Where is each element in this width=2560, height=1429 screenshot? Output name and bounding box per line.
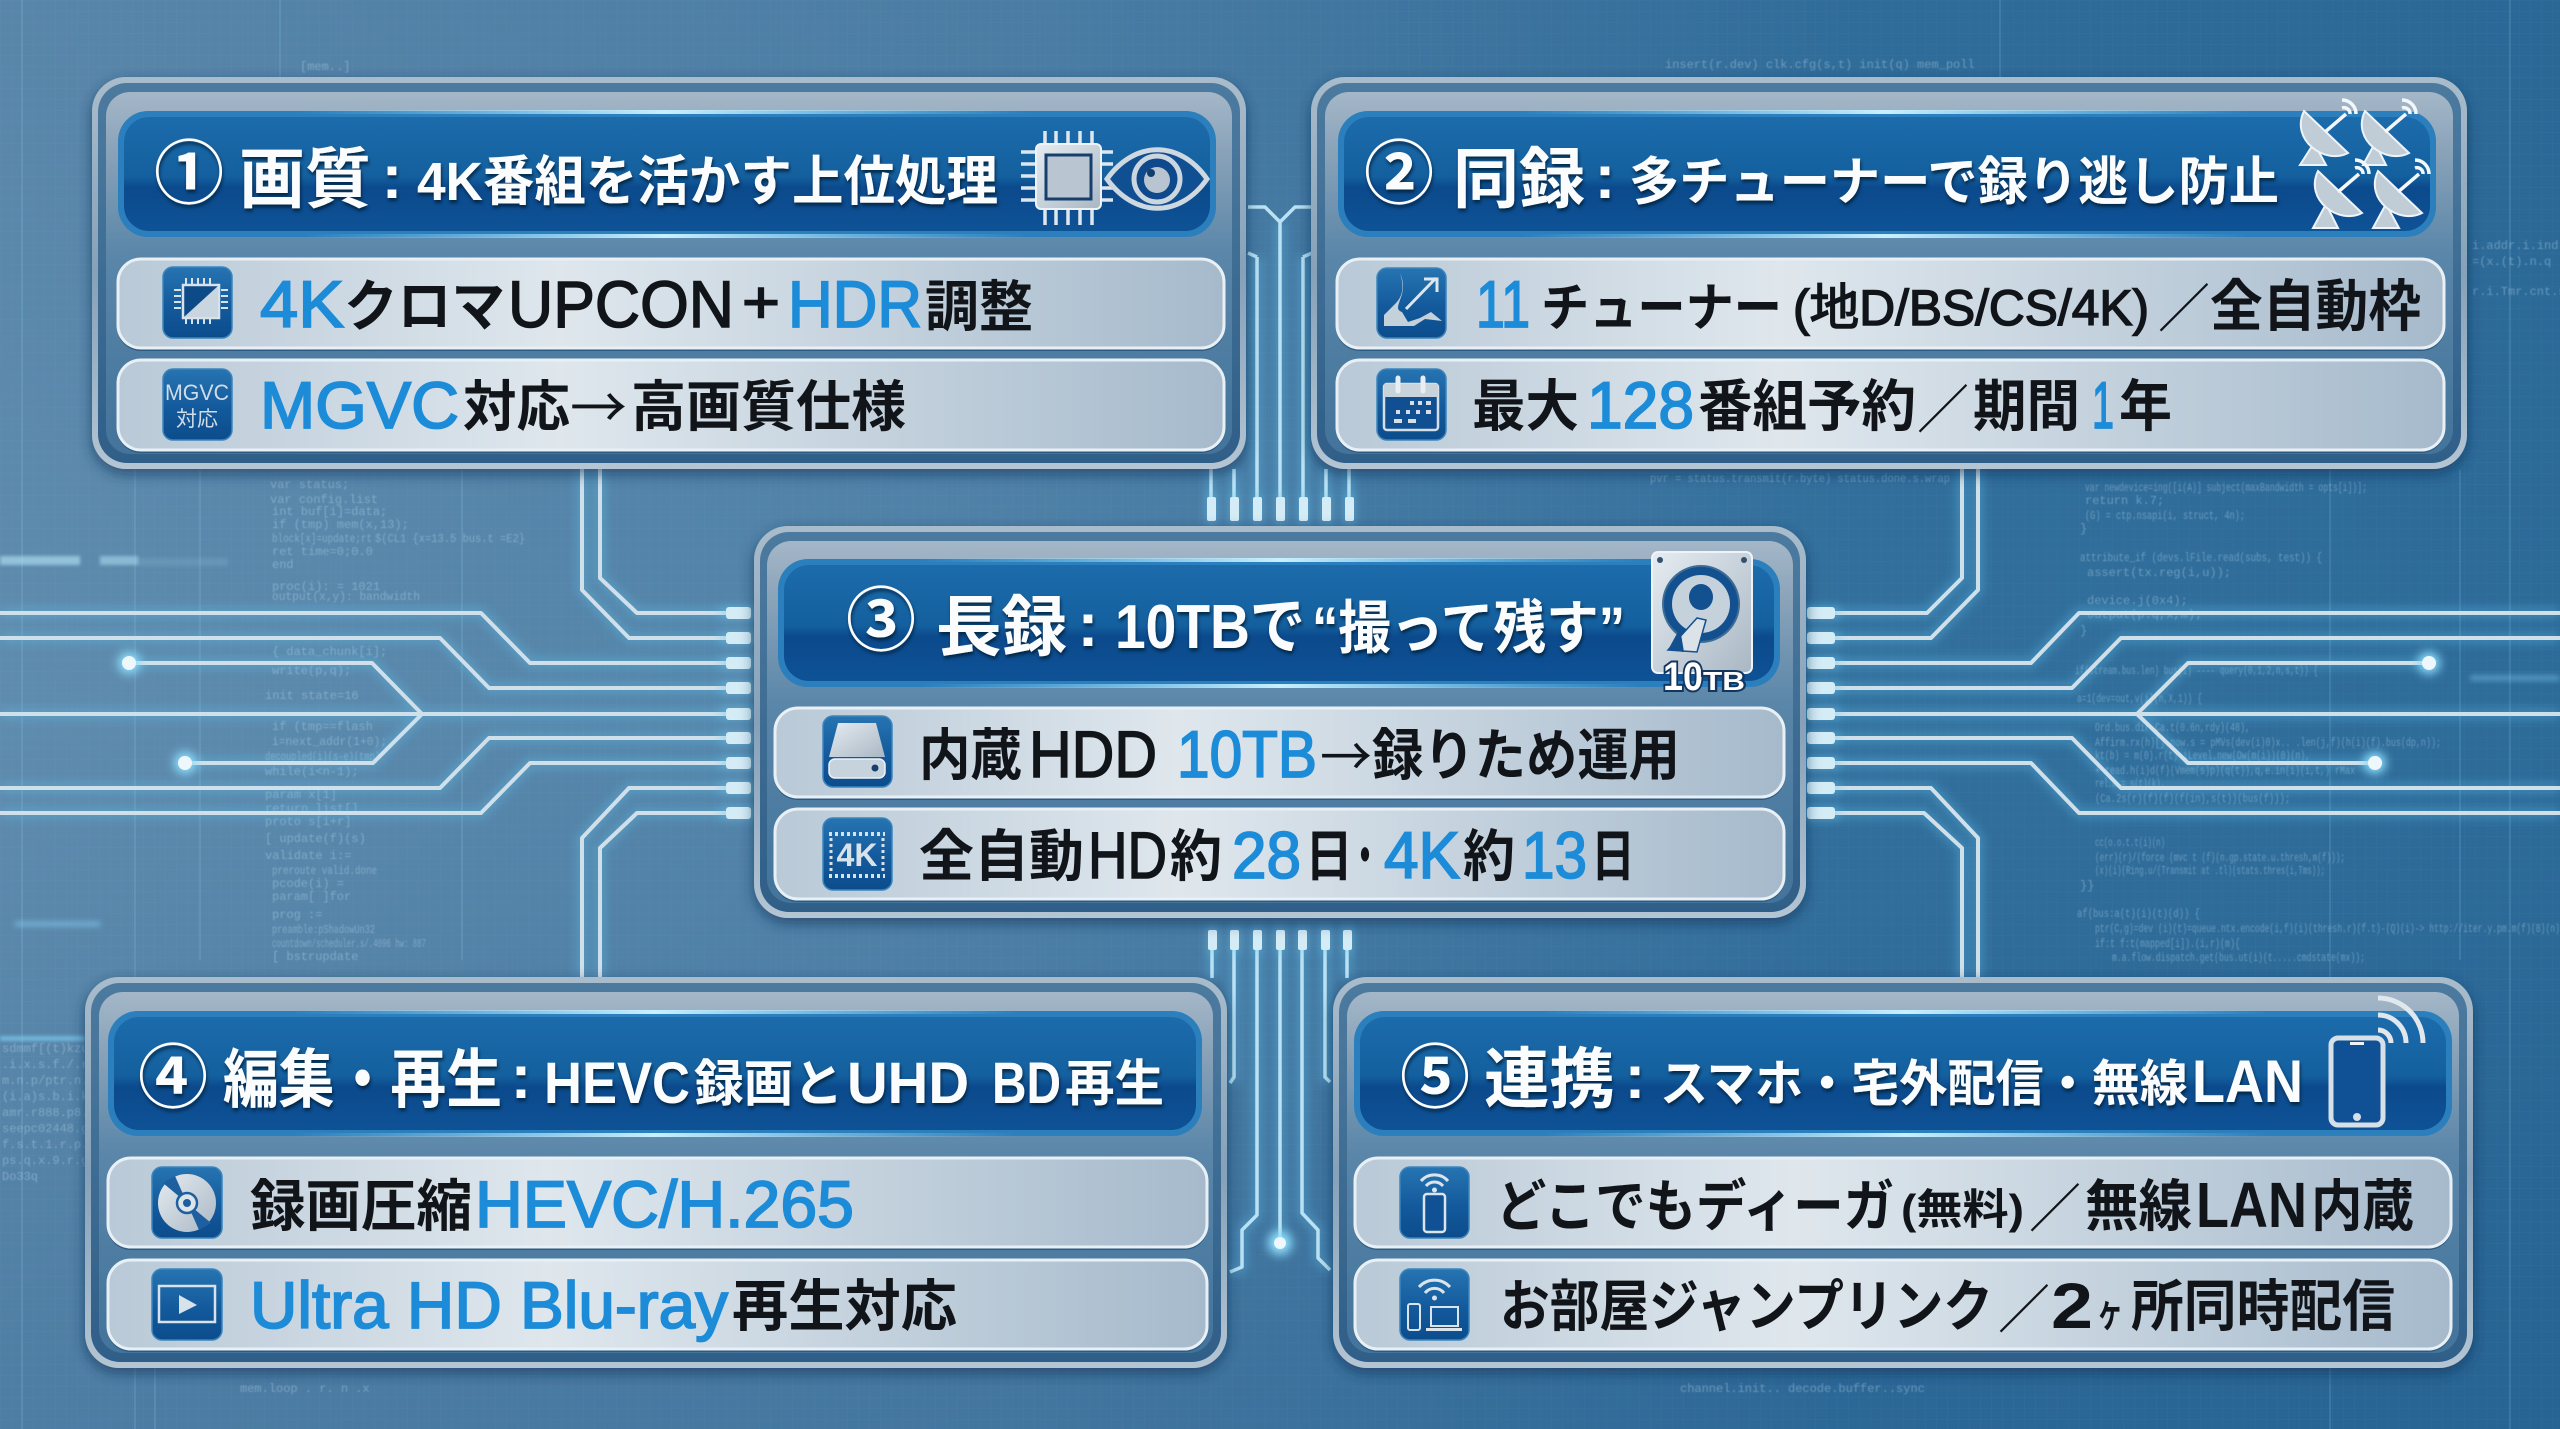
icon: MGVC bbox=[163, 369, 232, 440]
row: MGVC: 高画質仕様 bbox=[631, 376, 906, 438]
panel 5 heading: : bbox=[1625, 1043, 1645, 1112]
row: recording days: ・ bbox=[1349, 825, 1381, 888]
circuit traces bbox=[0, 207, 2560, 1272]
background code text: var newdevice=ing([i(A)] subject(maxBandwidth = opts[i])]; bbox=[2085, 481, 2367, 495]
background code text: Do33q bbox=[2, 1170, 38, 1184]
background code text: seepc02448.gbr. bbox=[2, 1122, 110, 1136]
panel 1 heading: ① bbox=[154, 135, 224, 213]
background code text: param[ ]for bbox=[272, 890, 351, 904]
trace end nodes bbox=[118, 652, 2440, 1255]
background code text: var status; bbox=[270, 478, 349, 492]
icon: smartphone wifi bbox=[2331, 998, 2423, 1125]
panel 1 heading: : bbox=[382, 143, 402, 212]
row: 4K chroma upconversion bbox=[117, 259, 1225, 351]
background code text: (i.a)s.b.i.k.l.3.z(7 bbox=[2, 1090, 146, 1104]
background code text: amr.r888.p8.g(r bbox=[2, 1106, 110, 1120]
background code text: m.a.flow.dispatch.get(bus.ut(i)(t.....cmdstate(mx)); bbox=[2112, 951, 2365, 965]
background code text: proto s[i+r] bbox=[265, 815, 351, 829]
background code text: sdmmf[(t)kzuo.tff bbox=[2, 1042, 124, 1056]
panel 3 heading: 10TBで bbox=[1115, 593, 1305, 662]
panel 3 heading: ③ bbox=[846, 582, 916, 660]
panel 3: long recording bbox=[754, 526, 1806, 918]
background code text: (Ca.2s(r)(f)(f)(f(in),s(t))(bus(f))); bbox=[2095, 792, 2290, 806]
row: Ultra HD Blu-ray bbox=[107, 1260, 1208, 1352]
panel 1 heading bbox=[118, 110, 1216, 238]
panel 2 heading: 同録 bbox=[1453, 142, 1585, 216]
row: 128 reservations: 年 bbox=[2119, 375, 2172, 438]
icon: hard disk 10TB: 10 bbox=[1663, 655, 1703, 699]
row: 4K chroma upconversion: クロマ bbox=[344, 275, 505, 338]
row: Ultra HD Blu-ray: 再生対応 bbox=[732, 1275, 957, 1338]
panel 2 frame bbox=[1311, 77, 2467, 469]
row: 11 tuners: (地D/BS/CS/4K) bbox=[1793, 280, 2149, 336]
panel 3 frame bbox=[754, 526, 1806, 918]
row: HEVC compression: HEVC/H.265 bbox=[475, 1167, 854, 1241]
row: room jump link: お部屋ジャンプリンク bbox=[1500, 1275, 1993, 1338]
row: 11 tuners: 11 bbox=[1476, 267, 1530, 341]
panel 4 heading: UHD bbox=[847, 1051, 969, 1116]
row: built-in HDD: 10TB bbox=[1177, 717, 1317, 791]
background code text: write(p,q); bbox=[272, 664, 351, 678]
row: built-in HDD bbox=[774, 708, 1785, 800]
background code text: pvr = status.transmit(r.byte) status.done.s.wrap bbox=[1650, 472, 1950, 486]
background code text: if(stream.bus.len) bus(i) ---- query(0,1,2,n,s,t)) { bbox=[2075, 664, 2318, 678]
row: 4K chroma upconversion: UPCON bbox=[508, 267, 734, 341]
icon: chip bbox=[163, 267, 232, 338]
row: room jump link: ／ bbox=[1998, 1268, 2050, 1343]
background code text: } bbox=[2080, 624, 2087, 638]
row: recording days bbox=[774, 809, 1785, 902]
background code text: if (tmp) mem(x,13); bbox=[272, 518, 409, 532]
panel 1 heading: 4K番組を活かす上位処理 bbox=[417, 152, 998, 212]
background code text: channel.init.. decode.buffer..sync bbox=[1680, 1382, 1925, 1396]
background code text: if (tmp==flash bbox=[272, 720, 373, 734]
icon: drive bbox=[823, 716, 892, 787]
row: 11 tuners: ／ bbox=[2158, 267, 2210, 342]
panel 4 frame bbox=[85, 977, 1227, 1368]
background code text: return k.7; bbox=[2085, 494, 2164, 508]
row: HEVC compression: 録画圧縮 bbox=[250, 1175, 472, 1238]
background code text: a=1(dev=out,v(i)(n,X,1)) { bbox=[2077, 692, 2202, 706]
icon: 4K bbox=[823, 818, 892, 890]
row: HEVC compression bbox=[107, 1158, 1208, 1250]
connector pads bbox=[726, 497, 1835, 950]
panel 4 heading: HEVC bbox=[544, 1051, 690, 1116]
row: MGVC: → bbox=[570, 363, 627, 445]
background code text: return list[] bbox=[265, 802, 359, 816]
row: 11 tuners bbox=[1336, 259, 2445, 351]
panel 4 heading: 再生 bbox=[1065, 1056, 1164, 1112]
trace glow bbox=[0, 222, 2560, 1272]
row: recording days: HD bbox=[1088, 818, 1167, 892]
icon: hard disk 10TB bbox=[1652, 552, 1752, 699]
panel 2 heading: 多チューナーで録り逃し防止 bbox=[1629, 154, 2279, 212]
panel 5 heading bbox=[1354, 998, 2452, 1137]
background code text: validate i:= bbox=[265, 849, 351, 863]
background code text: ret time=0;0.0 bbox=[272, 545, 373, 559]
row: 128 reservations bbox=[1336, 360, 2445, 453]
panel 4 heading: 録画と bbox=[694, 1056, 843, 1112]
icon: play screen bbox=[152, 1269, 222, 1340]
row: recording days: 全自動 bbox=[919, 825, 1084, 888]
background code text: + read.h(i)d(f)(Vmem(s)p)(q(t)),q,e.in(i)(i,t,) rMax bbox=[2095, 764, 2355, 778]
panel 3 heading: 長録 bbox=[936, 590, 1067, 664]
panel 2 heading: ② bbox=[1364, 135, 1434, 213]
background code text: var config.list bbox=[270, 493, 378, 507]
icon: devices wifi bbox=[1400, 1269, 1469, 1340]
background code text: { data_chunk[i]; bbox=[272, 645, 387, 659]
trace lines bbox=[0, 207, 2560, 1272]
row: built-in HDD: 録りため運用 bbox=[1372, 724, 1680, 787]
background code text: ps.q.x.9.r.g.p.9.f. bbox=[2, 1154, 139, 1168]
panel 4: edit and playback bbox=[85, 977, 1227, 1368]
panel 4 heading bbox=[108, 1010, 1202, 1137]
row: recording days: 4K bbox=[1384, 818, 1460, 892]
row: MGVC: MGVC bbox=[260, 368, 459, 442]
background code text: [ bstrupdate bbox=[272, 950, 358, 964]
background code text: proc(i): = 1021 bbox=[272, 580, 380, 594]
row: Dokodemo DIGA: (無料) bbox=[1901, 1186, 2024, 1233]
panel 4 heading: BD bbox=[992, 1051, 1061, 1116]
background code text: pcode(i) = bbox=[272, 877, 344, 891]
panel 4 heading: 編集・再生 bbox=[223, 1044, 502, 1116]
background code text: kt(b) = m(0).r(t) iLevel.new(Ow(m(i))(0)(n), bbox=[2095, 749, 2310, 763]
row: recording days: 約 bbox=[1463, 825, 1515, 888]
icon: MGVC: MGVC bbox=[165, 380, 229, 405]
row: 128 reservations: 128 bbox=[1587, 368, 1694, 442]
row: built-in HDD: 内蔵 bbox=[919, 724, 1022, 787]
background code text: device.j(0x4); bbox=[2087, 594, 2188, 608]
row: 4K chroma upconversion: 調整 bbox=[925, 276, 1033, 338]
background code text: while(i<n-1); bbox=[265, 765, 359, 779]
row: recording days: 13 bbox=[1522, 818, 1587, 892]
icon: disc bbox=[152, 1167, 222, 1238]
panel 3 heading bbox=[778, 552, 1780, 699]
panel 5 frame bbox=[1333, 977, 2473, 1368]
icon: chip and eye bbox=[1021, 131, 1207, 225]
background code text: int buf[i]=data; bbox=[272, 505, 387, 519]
row: MGVC: 対応 bbox=[463, 376, 570, 438]
row: Dokodemo DIGA: 内蔵 bbox=[2311, 1175, 2414, 1238]
row: Dokodemo DIGA bbox=[1354, 1158, 2452, 1250]
background code text: preroute valid.done bbox=[272, 864, 377, 878]
background code text: countdown/scheduler.s/.4096 hw: 887 bbox=[272, 937, 426, 951]
panel 4 heading: : bbox=[511, 1043, 531, 1112]
icon: antenna arrow bbox=[1377, 268, 1446, 338]
background code text: rel.m = s(t)(k), bbox=[2095, 777, 2165, 791]
row: 4K chroma upconversion: + bbox=[742, 269, 780, 336]
row: 11 tuners: 全自動枠 bbox=[2210, 275, 2421, 338]
background code text: decoupled(i)(s-e)(tmp) bbox=[265, 750, 380, 764]
row: room jump link: ヶ bbox=[2097, 1291, 2123, 1335]
panel 5 heading: 連携 bbox=[1484, 1042, 1615, 1116]
row: built-in HDD: → bbox=[1320, 713, 1372, 792]
icon: calendar bbox=[1377, 369, 1446, 440]
row: 128 reservations: ／ bbox=[1917, 368, 1969, 443]
panel 2 heading: : bbox=[1595, 143, 1615, 212]
panel 1: picture quality bbox=[92, 77, 1246, 469]
row: Dokodemo DIGA: ／ bbox=[2029, 1167, 2081, 1242]
row: room jump link: 2 bbox=[2051, 1270, 2093, 1342]
panel 2 heading bbox=[1338, 100, 2436, 238]
row: built-in HDD: HDD bbox=[1029, 717, 1157, 791]
background code text: Ord.bus.dir.Ca.t(0.6n,rdy)(48), bbox=[2095, 721, 2250, 735]
background code text: prog := bbox=[272, 908, 322, 922]
icon: hard disk 10TB: TB bbox=[1703, 666, 1745, 696]
row: Dokodemo DIGA: どこでもディーガ bbox=[1496, 1175, 1894, 1238]
background code text: preamble:pShadowUn32 bbox=[272, 923, 375, 937]
icon: MGVC: 対応 bbox=[176, 408, 218, 431]
background code text: m.n.p/ptr.n.pseam bbox=[2, 1074, 124, 1088]
icon: phone wifi bbox=[1400, 1167, 1469, 1238]
background code text: af(bus:a(t)(i)(t)(d)) { bbox=[2077, 907, 2200, 921]
background code text: output(x,y): bandwidth bbox=[272, 590, 420, 604]
panel 5 heading: ⑤ bbox=[1400, 1039, 1470, 1117]
background code text: if:t f:t(mapped[i]).(i,r)(m){ bbox=[2095, 937, 2240, 951]
panel 4 heading: ④ bbox=[138, 1039, 208, 1117]
background code text: init state=16 bbox=[265, 689, 359, 703]
background code text: output(p.q,x,m); bbox=[2087, 608, 2202, 622]
row: 128 reservations: 1 bbox=[2092, 368, 2114, 442]
row: recording days: 日 bbox=[1591, 825, 1635, 888]
row: 4K chroma upconversion: 4K bbox=[260, 267, 344, 341]
background code text: param x[1] bbox=[265, 788, 337, 802]
background code text: [mem..] bbox=[300, 60, 350, 74]
row: MGVC bbox=[117, 360, 1225, 453]
row: Dokodemo DIGA: LAN bbox=[2196, 1169, 2307, 1241]
background code text: mem.loop . r. n .x bbox=[240, 1382, 370, 1396]
row: recording days: 約 bbox=[1170, 825, 1222, 888]
row: 11 tuners: チューナー bbox=[1541, 280, 1782, 338]
row: 4K chroma upconversion: HDR bbox=[788, 267, 922, 341]
background code text: (G) = ctp.nsapi(i, struct, 4n); bbox=[2085, 509, 2245, 523]
background code text: attribute_if (devs.lFile.read(subs, test)) { bbox=[2080, 551, 2322, 565]
row: recording days: 日 bbox=[1305, 825, 1353, 888]
background code text: $(CL1 {x=13.5 bus.t =E2} bbox=[375, 532, 525, 546]
background code text: insert(r.dev) clk.cfg(s,t) init(q) mem_poll bbox=[1665, 58, 1975, 72]
background code text: } bbox=[2080, 522, 2087, 536]
background code text: end bbox=[272, 558, 294, 572]
background code text: [ update(f)(s) bbox=[265, 832, 366, 846]
background code text: cc(o.o.t.t(i)(n) bbox=[2095, 836, 2165, 850]
background code text: =(x.(t).n.q bbox=[2472, 255, 2551, 269]
background code text: assert(tx.reg(i,u)); bbox=[2087, 566, 2231, 580]
panel 5 heading: LAN bbox=[2192, 1048, 2303, 1115]
row: 128 reservations: 期間 bbox=[1973, 375, 2080, 438]
panel 2: simultaneous recording bbox=[1311, 77, 2467, 469]
background code text: f.s.t.1.r.p.g.s(t) bbox=[2, 1138, 132, 1152]
background code text: }} bbox=[2080, 879, 2094, 893]
background code text: i=next_addr(1+0); bbox=[272, 735, 387, 749]
row: 128 reservations: 番組予約 bbox=[1698, 375, 1916, 438]
panel 5: connectivity bbox=[1333, 977, 2473, 1368]
row: 128 reservations: 最大 bbox=[1472, 375, 1579, 438]
row: room jump link: 所同時配信 bbox=[2131, 1275, 2395, 1338]
background code text: .i.x.s.f./.r.n.z(q) bbox=[2, 1058, 139, 1072]
row: room jump link bbox=[1354, 1260, 2452, 1352]
panel 1 frame bbox=[92, 77, 1246, 469]
row: recording days: 28 bbox=[1232, 818, 1301, 892]
background code text: block[x]=update;rt bbox=[272, 532, 372, 546]
icon: satellite dishes bbox=[2300, 100, 2429, 228]
panel 1 heading: 画質 bbox=[239, 142, 371, 216]
panel 3 heading: “撮って残す” bbox=[1312, 596, 1625, 661]
row: Dokodemo DIGA: 無線 bbox=[2085, 1175, 2192, 1238]
panel 3 heading: : bbox=[1078, 591, 1098, 660]
row: Ultra HD Blu-ray: Ultra HD Blu-ray bbox=[250, 1268, 728, 1342]
background code text: (err)(r)/(force (mvc t (f)(n.gp.state.u.thresh,m(f))); bbox=[2095, 851, 2345, 865]
panel 5 heading: スマホ・宅外配信・無線 bbox=[1660, 1056, 2188, 1112]
icon: 4K: 4K bbox=[837, 837, 877, 873]
background code text: (x)(i)(Ring.u/(Transmit at .tl)(stats.thres(i,Tms)); bbox=[2095, 864, 2325, 878]
